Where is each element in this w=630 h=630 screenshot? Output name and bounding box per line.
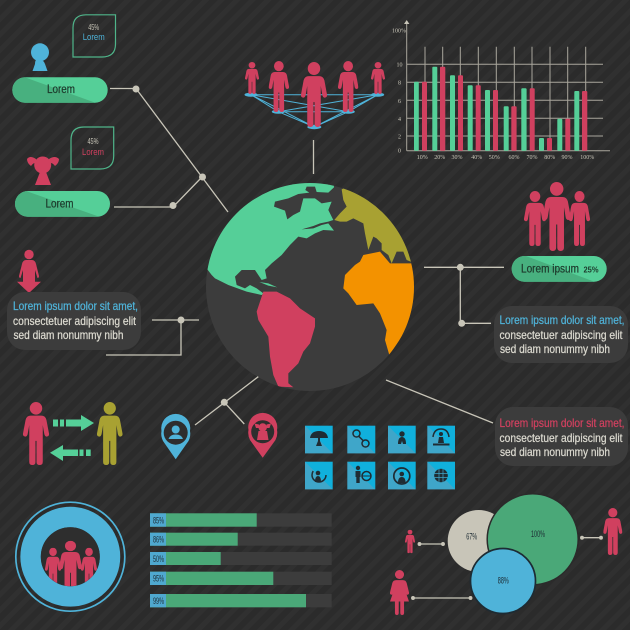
axis labels: 70% — [526, 155, 538, 161]
icon: girl — [27, 156, 59, 185]
axis labels: 60% — [508, 155, 520, 161]
callout: 45% Lorem red: Lorem — [82, 147, 104, 157]
icon: woman — [390, 570, 409, 615]
connector lines: top left — [110, 86, 228, 212]
connector: right — [424, 264, 504, 327]
text block: left: sed diam nonummy nibh — [14, 328, 124, 342]
continent: north america — [208, 183, 334, 295]
progress bars — [150, 513, 332, 607]
connector: lower pins — [195, 377, 258, 425]
text block: left: Lorem ipsum dolor sit amet, — [13, 299, 138, 313]
pill: Lorem 1: Lorem — [47, 82, 75, 96]
axis labels: 8 — [398, 80, 401, 86]
icon: small person — [405, 530, 415, 553]
axis labels: 100% — [580, 155, 594, 161]
continent: europe and asia — [334, 188, 411, 264]
icon: person with down arrow — [17, 250, 41, 293]
green bars — [414, 67, 579, 151]
callout: 45% Lorem red — [71, 127, 114, 169]
text block: right: sed diam nonummy nibh — [500, 342, 610, 356]
text block: lower right — [495, 407, 628, 466]
pill: Lorem ipsum 25%: 25% — [584, 266, 598, 274]
axis labels: 40% — [471, 155, 482, 161]
venn diagram: 100% — [531, 529, 545, 539]
text block: right — [494, 306, 628, 363]
progress bars: 50% — [153, 554, 164, 564]
connector: network to globe — [312, 140, 314, 174]
axis labels: 6 — [398, 99, 401, 105]
text block: lower right: sed diam nonummy nibh — [500, 445, 610, 459]
axis labels: 90% — [562, 155, 572, 161]
donut with family — [16, 502, 125, 611]
axis labels: 50% — [489, 155, 500, 161]
red bars — [422, 67, 587, 151]
continent: south america — [257, 292, 315, 387]
pill: Lorem 1 — [12, 77, 108, 103]
axis labels: 10% — [417, 155, 428, 161]
icon: red location pin — [248, 413, 277, 458]
connectors: venn — [412, 536, 602, 599]
callout: 45% Lorem blue: 45% — [88, 23, 99, 32]
text block: left — [7, 292, 141, 350]
network of people — [244, 61, 385, 129]
island: cuba — [259, 282, 277, 287]
bar chart — [392, 20, 610, 161]
pill: Lorem 2 — [15, 191, 110, 217]
icon: exchange between two people — [23, 402, 123, 465]
axis labels: 4 — [398, 117, 401, 123]
progress bars: 85% — [153, 515, 164, 525]
axis labels: 2 — [398, 134, 401, 140]
text block: left: consectetuer adipiscing elit — [13, 314, 137, 328]
globe — [200, 177, 420, 391]
icon: large person — [603, 508, 622, 555]
continent: africa — [343, 252, 420, 355]
axis labels: 100% — [392, 28, 406, 34]
callout: 45% Lorem blue: Lorem — [83, 32, 105, 42]
connector: left — [106, 316, 199, 355]
progress bars: 99% — [153, 596, 164, 606]
venn diagram — [448, 494, 578, 614]
callout: 45% Lorem blue — [73, 15, 116, 57]
progress bars: 86% — [153, 534, 164, 544]
axis labels — [392, 28, 594, 161]
pill: Lorem ipsum 25%: Lorem ipsum — [521, 262, 579, 276]
venn diagram: 67% — [466, 532, 477, 542]
progress bars: 95% — [153, 574, 164, 584]
icon: blue location pin — [161, 414, 190, 459]
venn diagram: 88% — [498, 576, 509, 586]
pill: Lorem ipsum 25% — [511, 256, 607, 282]
axis labels: 0 — [398, 148, 401, 154]
icon: boy — [31, 43, 49, 71]
icon grid — [305, 426, 455, 489]
axis labels: 30% — [452, 155, 462, 161]
icon: group of three people — [524, 182, 590, 251]
axis labels: 10 — [396, 62, 402, 68]
pill: Lorem 2: Lorem — [46, 196, 74, 210]
connector: lower right — [386, 380, 493, 423]
axis labels: 80% — [544, 155, 555, 161]
callout: 45% Lorem red: 45% — [88, 137, 98, 146]
axis labels: 20% — [434, 155, 445, 161]
